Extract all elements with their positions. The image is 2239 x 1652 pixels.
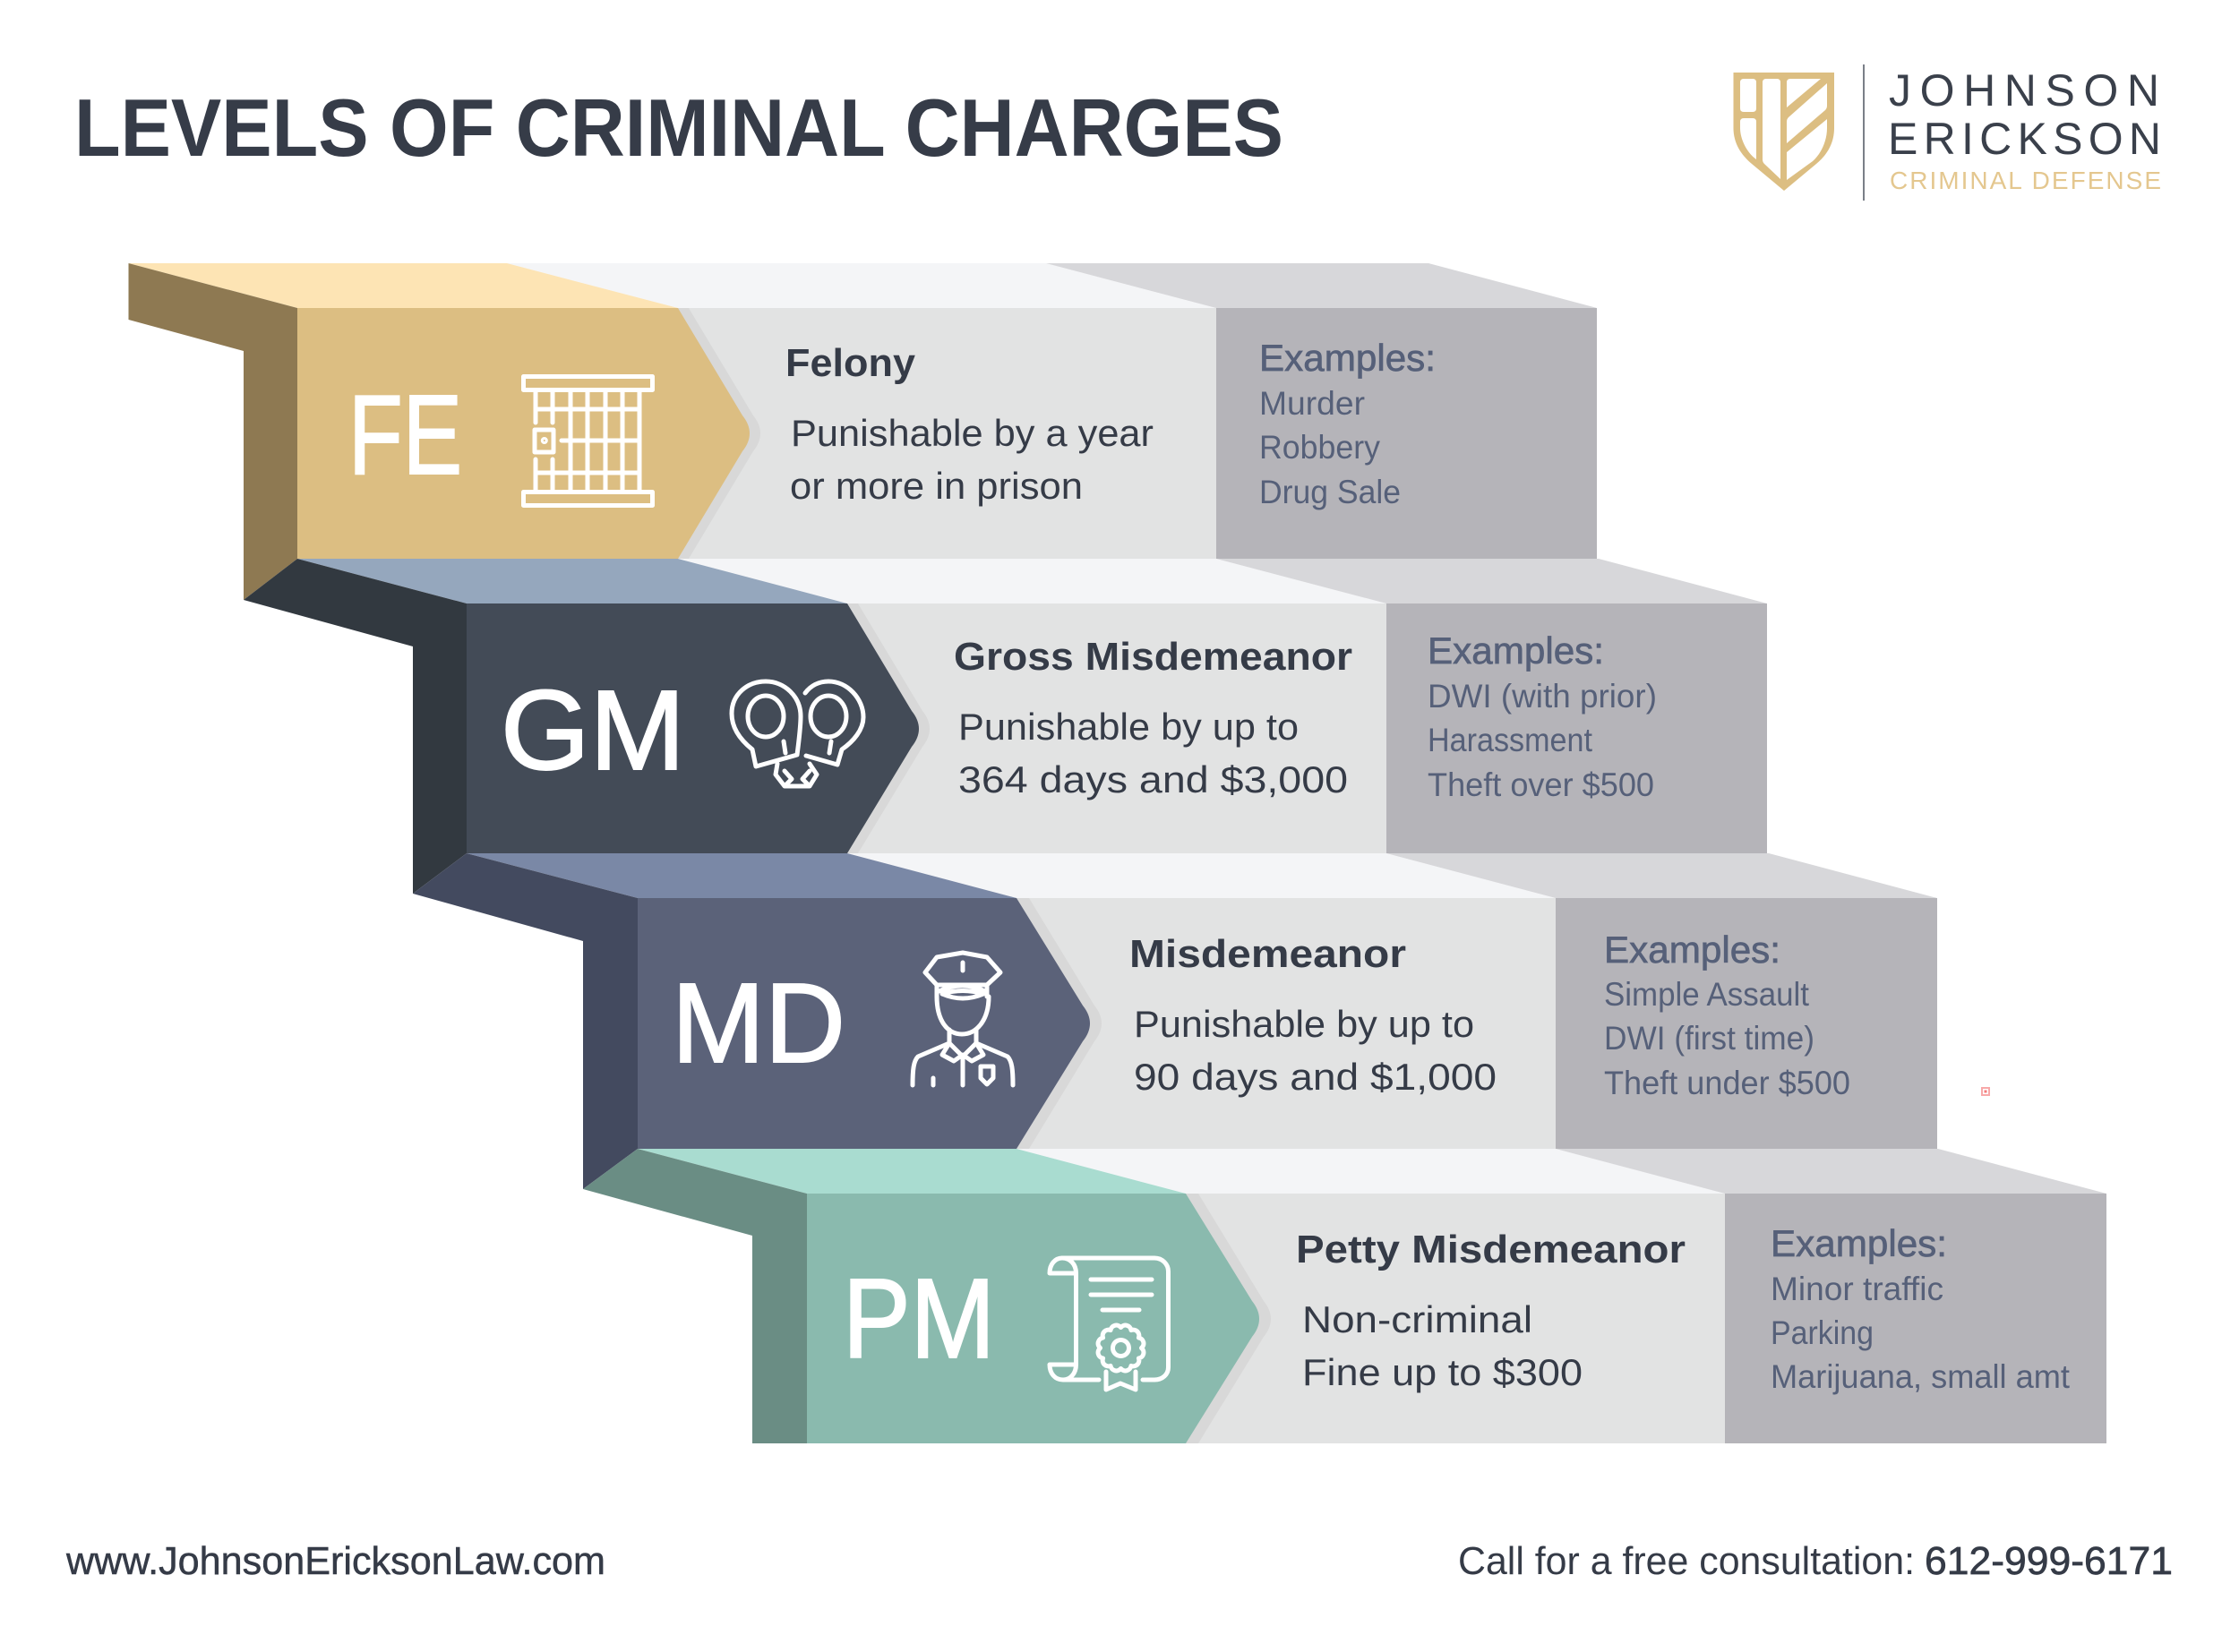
examples: felony (1259, 337, 1436, 510)
logo wordmark: ERICKSON (1888, 114, 2161, 164)
footer: consultation call: Call for a free consultation: (1458, 1539, 1915, 1583)
logo (1734, 64, 2161, 201)
examples: petty misdemeanor: Examples: (1771, 1222, 1947, 1264)
examples: petty misdemeanor: Marijuana, small amt (1771, 1358, 2071, 1395)
panel: felony (129, 263, 1597, 600)
text: petty misdemeanor description (1302, 1298, 1583, 1393)
examples: misdemeanor: Theft under $500 (1604, 1065, 1850, 1101)
icon: handcuffs (732, 681, 863, 786)
examples: felony: Examples: (1259, 337, 1436, 379)
examples: gross misdemeanor: Examples: (1428, 629, 1604, 672)
text: gross misdemeanor description: 364 days and $3,000 (958, 758, 1348, 800)
examples: gross misdemeanor: DWI (with prior) (1428, 678, 1657, 715)
footer: website: www.JohnsonEricksonLaw.com (65, 1539, 605, 1583)
icon: certificate (1050, 1258, 1168, 1390)
heading: felony: Felony (785, 341, 916, 385)
icon: shield (1734, 73, 1834, 191)
text: felony description: Punishable by a year (791, 412, 1154, 454)
examples: felony: Drug Sale (1259, 474, 1401, 510)
text: misdemeanor description (1134, 1003, 1497, 1098)
examples: misdemeanor: Simple Assault (1604, 976, 1810, 1013)
text: petty misdemeanor description: Non-criminal (1302, 1298, 1532, 1340)
panel: petty misdemeanor (583, 1149, 2106, 1443)
examples: misdemeanor (1604, 929, 1850, 1101)
heading: gross misdemeanor: Gross Misdemeanor (954, 635, 1352, 679)
text: felony description (790, 412, 1154, 507)
examples: gross misdemeanor: Harassment (1428, 722, 1593, 758)
footer: consultation call: 612-999-6171 (1925, 1539, 2173, 1583)
icon: police officer (913, 953, 1013, 1085)
logo wordmark: JOHNSON (1889, 65, 2159, 116)
examples: petty misdemeanor (1771, 1222, 2071, 1395)
panel: misdemeanor (413, 853, 1937, 1189)
examples: petty misdemeanor: Minor traffic (1771, 1271, 1943, 1307)
text: misdemeanor description: 90 days and $1,000 (1134, 1056, 1497, 1098)
examples: felony: Murder (1259, 385, 1365, 422)
code: FE: FE (348, 372, 462, 498)
logo wordmark (1888, 65, 2161, 194)
logo wordmark: CRIMINAL DEFENSE (1890, 167, 2161, 194)
examples: gross misdemeanor (1428, 629, 1657, 803)
text: misdemeanor description: Punishable by up to (1134, 1003, 1474, 1045)
heading: misdemeanor: Misdemeanor (1129, 932, 1406, 976)
marker: small pink square (1982, 1088, 1989, 1095)
text: gross misdemeanor description (958, 706, 1348, 800)
text: gross misdemeanor description: Punishable by up to (958, 706, 1299, 748)
icon: jail cell (523, 376, 652, 505)
examples: misdemeanor: Examples: (1604, 929, 1780, 971)
examples: gross misdemeanor: Theft over $500 (1428, 766, 1654, 803)
text: petty misdemeanor description: Fine up to $300 (1302, 1351, 1583, 1393)
footer: consultation call (1458, 1539, 2173, 1583)
title: LEVELS OF CRIMINAL CHARGES (74, 83, 1283, 174)
heading: petty misdemeanor: Petty Misdemeanor (1296, 1228, 1686, 1271)
code: MD: MD (672, 960, 845, 1086)
panel: gross misdemeanor (244, 559, 1767, 894)
examples: felony: Robbery (1259, 429, 1380, 466)
examples: misdemeanor: DWI (first time) (1604, 1020, 1814, 1057)
code: GM: GM (501, 667, 685, 793)
examples: petty misdemeanor: Parking (1771, 1314, 1874, 1351)
text: felony description: or more in prison (790, 465, 1083, 507)
code: PM: PM (843, 1255, 995, 1382)
